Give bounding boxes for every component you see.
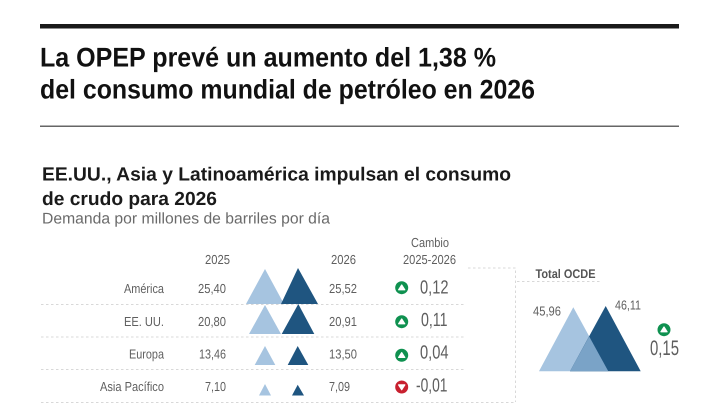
triangles: OCDE 2025 and 2026: [539, 306, 641, 371]
chart heading: EE.UU., Asia y Latinoamérica impulsan el consumo: [42, 164, 511, 186]
chart heading: de crudo para 2026: [42, 189, 217, 210]
column headers: [205, 235, 456, 267]
row: América: 25,52: [329, 281, 357, 296]
chart heading: [42, 164, 511, 210]
title: La OPEP prevé un aumento del 1,38 %: [40, 42, 496, 72]
chart subtitle: Demanda por millones de barriles por día: [42, 210, 330, 228]
row: EE. UU.: 20,91: [329, 314, 357, 329]
row: EE. UU.: [124, 304, 448, 334]
row: América: América: [124, 281, 165, 296]
row: Europa: Europa: [129, 346, 165, 362]
row: Europa: 13,46: [199, 346, 226, 362]
icon: green up arrow: [658, 323, 670, 336]
row: Asia Pacífico: 7,10: [205, 379, 226, 394]
panel: Total OCDE: [533, 267, 679, 371]
column headers: 2026: [331, 252, 356, 267]
value: change: 0,15: [650, 337, 679, 360]
title: del consumo mundial de petróleo en 2026: [40, 74, 535, 104]
row: Asia Pacífico: Asia Pacífico: [100, 379, 164, 394]
row: Asia Pacífico: -0,01: [416, 376, 448, 397]
column headers: 2025-2026: [403, 252, 456, 267]
row: América: [124, 268, 448, 304]
row: Europa: 0,04: [420, 343, 449, 364]
row: Europa: [129, 343, 449, 365]
row: EE. UU.: 20,80: [198, 314, 226, 329]
row: Europa: 13,50: [329, 346, 357, 362]
row: América: 0,12: [420, 278, 448, 298]
value: 2025: 45,96: [533, 304, 561, 319]
column headers: Cambio: [411, 235, 449, 250]
row: EE. UU.: EE. UU.: [124, 314, 164, 329]
row: EE. UU.: 0,11: [421, 310, 448, 331]
row: Asia Pacífico: 7,09: [329, 379, 350, 394]
heading: Total OCDE: Total OCDE: [536, 267, 596, 281]
title: [40, 42, 535, 104]
column headers: 2025: [205, 252, 230, 267]
value: 2026: 46,11: [615, 297, 641, 312]
row: América: 25,40: [198, 281, 226, 296]
row: Asia Pacífico: [100, 376, 448, 397]
